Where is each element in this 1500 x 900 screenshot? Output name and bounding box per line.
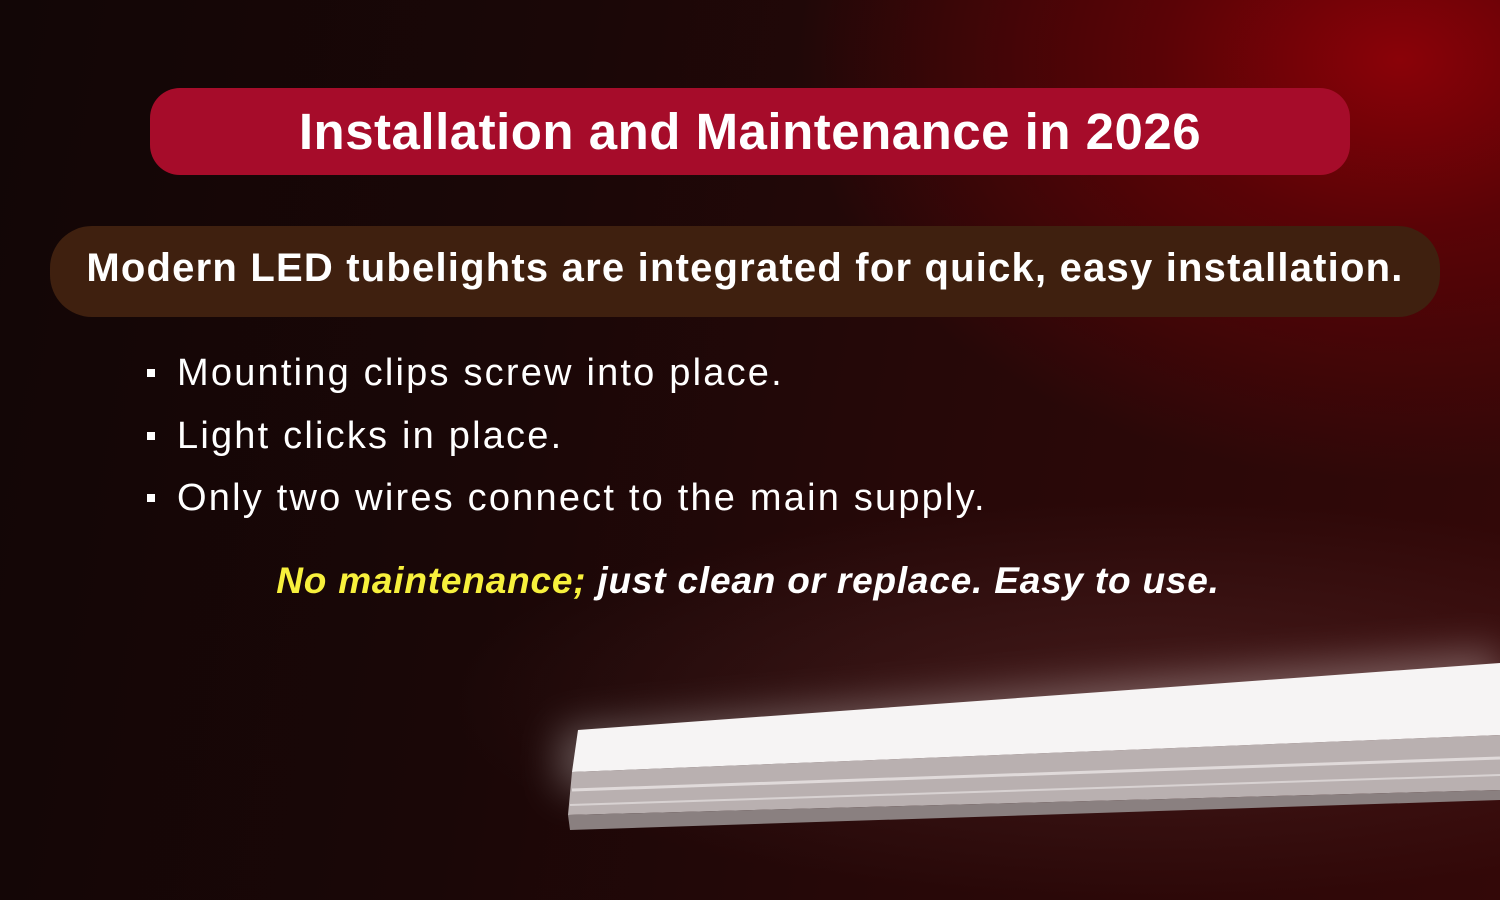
bullet list: Mounting clips screw into place. xyxy=(177,352,784,394)
bullet list: Only two wires connect to the main supply. xyxy=(177,477,987,519)
image: LED tube light xyxy=(538,631,1500,830)
bullet list: Light clicks in place. xyxy=(177,414,563,456)
title: Installation and Maintenance in 2026 xyxy=(299,103,1201,160)
subtitle banner: Modern LED tubelights are integrated for quick, easy installation. xyxy=(86,246,1404,290)
title xyxy=(150,88,1350,175)
subtitle banner xyxy=(50,226,1440,317)
bullet list xyxy=(147,352,987,519)
maintenance note: No maintenance; just clean or replace. Easy to use. xyxy=(276,560,1220,601)
